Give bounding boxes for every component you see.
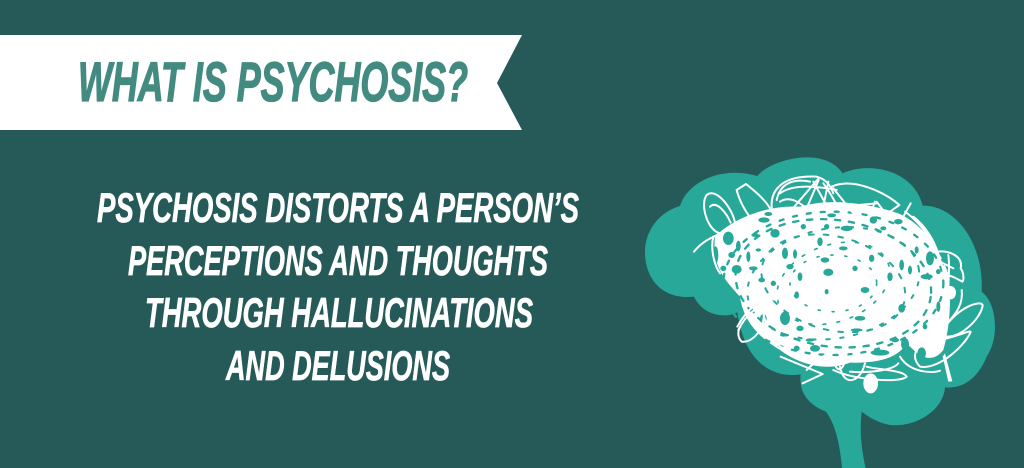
scribble blob right [945, 286, 956, 299]
banner ribbon [0, 35, 522, 130]
scribble core [714, 202, 950, 367]
definition text block: THROUGH HALLUCINATIONS [145, 289, 533, 336]
tangled scribble [694, 177, 983, 393]
icon: brain with tangled scribble [645, 157, 995, 468]
scribble gaps [713, 212, 947, 359]
scribble drop [863, 373, 878, 393]
brain silhouette [645, 157, 995, 468]
definition text block: AND DELUSIONS [225, 342, 450, 389]
scribble loops [694, 177, 983, 383]
scribble curved gaps [723, 207, 943, 360]
scribble spike [943, 353, 952, 382]
title: WHAT IS PSYCHOSIS? [78, 50, 468, 113]
definition text block: PSYCHOSIS DISTORTS A PERSON’S [97, 184, 579, 231]
definition text block: PERCEPTIONS AND THOUGHTS [128, 237, 548, 284]
definition text block [97, 184, 579, 389]
